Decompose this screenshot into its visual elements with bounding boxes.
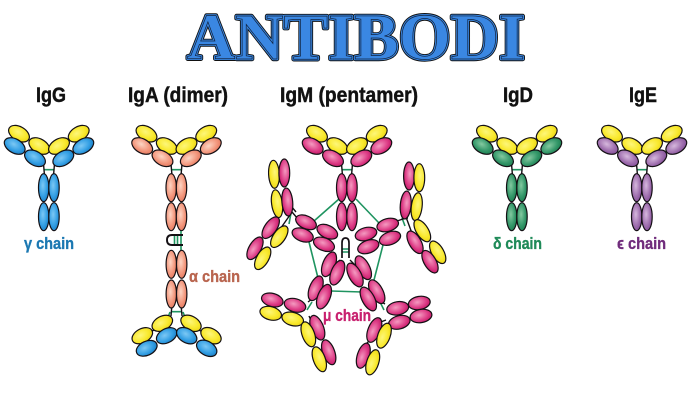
IgM top monomer <box>299 122 395 231</box>
IgM J chain <box>342 238 349 258</box>
IgM upper-right monomer <box>354 162 449 276</box>
antibody: IgE monomer <box>594 122 690 231</box>
IgA upper monomer <box>129 122 224 231</box>
title: ANTIBODI <box>187 1 525 74</box>
heading: IgG: IgG <box>36 84 66 107</box>
IgA J chain <box>167 231 183 252</box>
label: gamma chain: γ chain <box>24 234 74 253</box>
antibody: IgM pentamer <box>244 122 449 377</box>
antibody: IgG monomer <box>1 122 97 231</box>
label: mu chain: μ chain <box>323 306 371 325</box>
label: alpha chain: α chain <box>189 267 240 286</box>
label: delta chain: δ chain <box>493 234 542 253</box>
heading: IgE: IgE <box>629 84 657 107</box>
heading: IgA (dimer): IgA (dimer) <box>128 84 228 107</box>
heading: IgM (pentamer): IgM (pentamer) <box>280 84 418 107</box>
label: epsilon chain: ϵ chain <box>617 234 666 253</box>
IgM lower-left monomer <box>258 250 348 374</box>
IgM lower-right monomer <box>343 253 433 377</box>
antibody: IgA dimer <box>129 122 224 360</box>
title: ANTIBODI <box>187 1 525 74</box>
title: ANTIBODI <box>187 1 525 74</box>
heading: IgD: IgD <box>503 84 533 107</box>
IgM upper-left monomer <box>244 159 340 272</box>
IgM connecting lines <box>289 199 405 310</box>
IgA lower monomer <box>129 250 224 360</box>
antibody: IgD monomer <box>469 122 565 231</box>
